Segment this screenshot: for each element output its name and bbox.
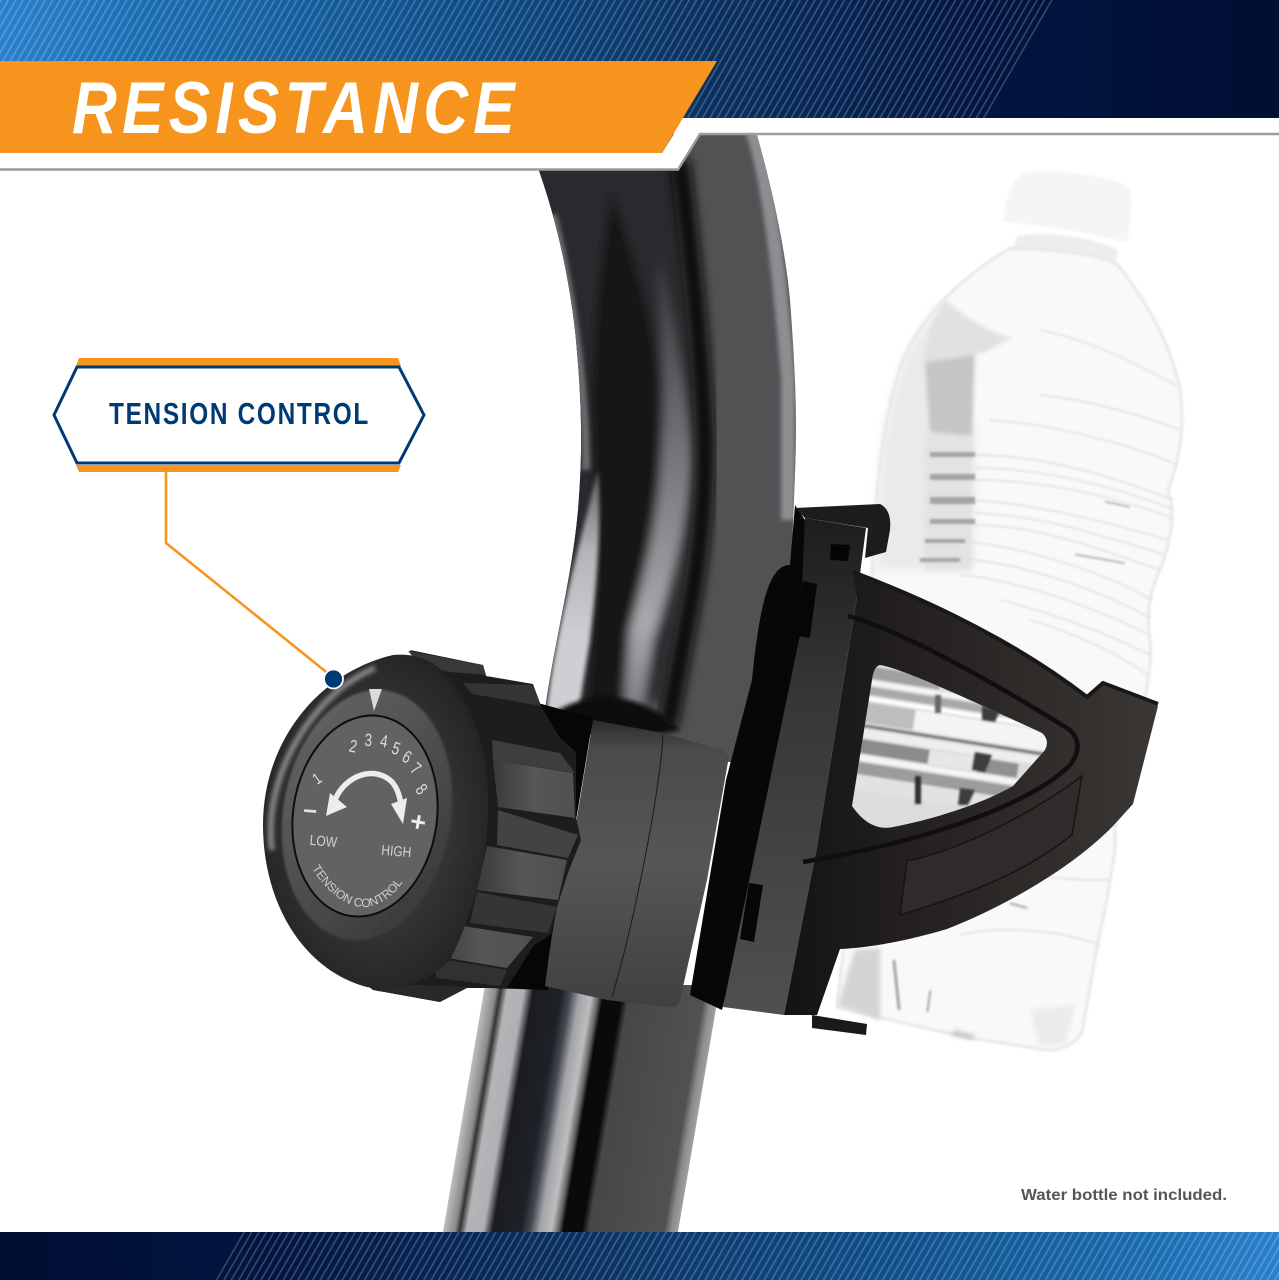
arm recessed panel bbox=[900, 776, 1082, 915]
callout hexagon bbox=[54, 367, 424, 463]
dial face bbox=[281, 707, 449, 925]
rib upper bbox=[463, 683, 541, 706]
arm top rim bbox=[853, 572, 1158, 704]
water bottle bbox=[833, 171, 1182, 1050]
tension knob bbox=[263, 622, 588, 1002]
knob cap bbox=[263, 655, 488, 989]
dial numbers: 8 bbox=[411, 781, 431, 799]
cup holder bracket bbox=[690, 504, 1158, 1035]
bottle body silhouette bbox=[837, 248, 1182, 1050]
dial numbers: 6 bbox=[398, 748, 415, 768]
rib band three bbox=[470, 892, 557, 933]
callout: tension control bbox=[54, 358, 424, 688]
dial curved label: TENSION CONTROL bbox=[314, 864, 402, 908]
dial numbers: 5 bbox=[389, 739, 403, 760]
bottle gray refraction band bbox=[925, 300, 1012, 570]
bracket rear shadow bbox=[690, 505, 805, 1010]
rib face two bbox=[477, 846, 567, 900]
direction arrow bbox=[326, 774, 407, 824]
bracket top tab bbox=[795, 504, 890, 558]
leader dot bbox=[324, 670, 343, 688]
knob gear body bbox=[360, 650, 581, 1002]
dial numbers: 2 bbox=[347, 737, 359, 757]
mid gray band bbox=[622, 250, 692, 725]
plus sign: + bbox=[408, 806, 429, 838]
dial numbers bbox=[309, 731, 431, 799]
pointer triangle bbox=[369, 689, 382, 711]
dial numbers: 7 bbox=[406, 759, 424, 779]
bracket plate bbox=[723, 518, 866, 1015]
minus sign: − bbox=[302, 797, 318, 826]
foot shadow bbox=[556, 696, 680, 734]
dial ring bbox=[264, 677, 470, 953]
dial numbers: 3 bbox=[364, 731, 373, 751]
black stripe bbox=[668, 160, 705, 725]
callout orange bars bbox=[76, 358, 401, 472]
bottle cap bbox=[1003, 171, 1132, 243]
gloss highlight bbox=[546, 470, 599, 715]
dial numbers: 4 bbox=[378, 732, 389, 752]
header stripes bbox=[0, 0, 1056, 118]
footnote: Water bottle not included. bbox=[1021, 1187, 1227, 1204]
header white strip bbox=[0, 118, 1279, 170]
high label: HIGH bbox=[381, 842, 412, 861]
knob top tab bbox=[408, 651, 486, 675]
footer gradient bbox=[0, 1232, 1279, 1280]
dark left band bbox=[539, 170, 692, 706]
rib face one bbox=[493, 760, 575, 818]
bottle ribs dark bbox=[892, 452, 1130, 1012]
footer band bbox=[0, 1232, 1279, 1280]
knob bottom tab bbox=[368, 983, 467, 1002]
bottle left pale zone bbox=[875, 300, 975, 570]
upper slot bbox=[796, 581, 817, 638]
callout label: TENSION CONTROL bbox=[109, 396, 370, 431]
banner shape bbox=[0, 61, 717, 153]
cup arm bbox=[784, 574, 1158, 1015]
lower slot bbox=[740, 883, 763, 942]
bottle through cup window bbox=[852, 665, 1045, 828]
pole clamp block bbox=[488, 690, 728, 1007]
title text: RESISTANCE bbox=[72, 68, 520, 149]
header gradient bbox=[0, 0, 1279, 118]
square slot bbox=[830, 544, 850, 561]
rib band one bbox=[492, 740, 575, 773]
rib band two bbox=[497, 810, 578, 858]
rib face three bbox=[430, 925, 533, 968]
right light band bbox=[752, 130, 788, 520]
upper pole bbox=[539, 134, 796, 762]
bottle neck bbox=[1012, 234, 1118, 268]
cap rim highlight bbox=[271, 668, 375, 850]
footer stripes bbox=[214, 1232, 1279, 1280]
window base bbox=[852, 665, 1044, 828]
rib band four bbox=[430, 957, 507, 986]
window dark reflections bbox=[915, 695, 1000, 805]
left edge band bbox=[553, 215, 586, 470]
bracket lower tab bbox=[812, 1015, 867, 1035]
low label: LOW bbox=[309, 832, 338, 850]
title banner bbox=[0, 61, 717, 153]
clamp shadow bbox=[488, 690, 593, 990]
pole base bbox=[530, 125, 810, 765]
header band bbox=[0, 0, 1279, 118]
leader line bbox=[166, 472, 330, 675]
black core bbox=[587, 204, 660, 699]
arm ridge bbox=[803, 616, 1078, 862]
dial edge bbox=[279, 705, 451, 927]
bottle ribs bbox=[950, 330, 1180, 945]
bottle crumpled bottom bbox=[838, 948, 1075, 1045]
lower pole bbox=[443, 985, 720, 1232]
clamp seam bbox=[612, 735, 663, 997]
dial numbers: 1 bbox=[309, 770, 325, 789]
clamp block bbox=[545, 720, 728, 1007]
